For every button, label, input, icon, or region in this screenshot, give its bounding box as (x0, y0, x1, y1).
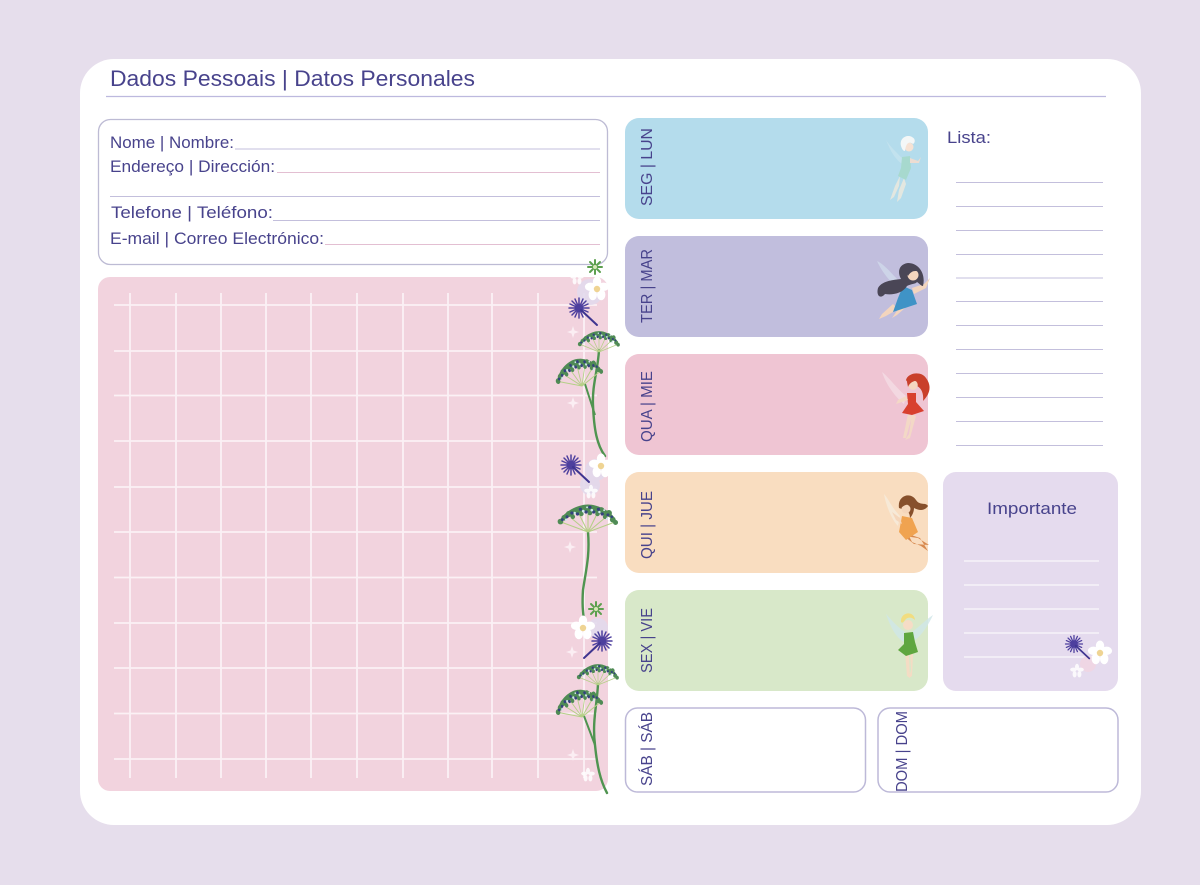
white card (80, 59, 1141, 825)
friday label: SEX | VIE (639, 608, 656, 673)
monday label: SEG | LUN (639, 128, 656, 206)
heading: Dados Pessoais | Datos Personales (110, 66, 475, 91)
panel: wednesday (625, 354, 930, 455)
lower blossoms (571, 602, 612, 658)
icon: red-haired fairy (882, 372, 930, 440)
panel: shopping list (947, 128, 1103, 446)
address field: Endereço | Dirección: (110, 157, 275, 176)
list heading: Lista: (947, 128, 991, 147)
sunday label: DOM | DOM (894, 711, 911, 792)
panel: saturday (626, 708, 866, 792)
icon: dark-haired fairy (877, 261, 930, 319)
flower cluster (1066, 636, 1112, 677)
important heading: Importante (987, 499, 1077, 518)
saturday label: SÁB | SÁB (639, 712, 656, 786)
upper umbel plant (552, 331, 620, 456)
top blossoms (569, 260, 609, 325)
middle umbel plant (558, 504, 618, 620)
pale flower shadows (577, 279, 608, 638)
panel: sunday (878, 708, 1118, 792)
flower garland (552, 260, 620, 793)
sparkles (564, 326, 579, 761)
panel: monday (625, 118, 928, 219)
panel: important (943, 472, 1118, 691)
name field: Nome | Nombre: (110, 133, 234, 152)
panel: tuesday (625, 236, 930, 337)
panel: friday (625, 590, 933, 691)
email field: E-mail | Correo Electrónico: (110, 229, 324, 248)
tuesday label: TER | MAR (639, 249, 656, 323)
wednesday label: QUA | MIE (639, 371, 656, 442)
icon: green fairy (886, 613, 933, 678)
thursday label: QUI | JUE (639, 491, 656, 559)
icon: pale fairy (886, 136, 921, 202)
panel: thursday (625, 472, 929, 573)
phone field: Telefone | Teléfono: (111, 203, 273, 222)
middle blossoms (561, 454, 613, 498)
panel: personal data (98, 120, 608, 264)
lower umbel plant (552, 664, 619, 793)
icon: brown-haired fairy (884, 494, 929, 551)
panel: pink grid notes (98, 277, 608, 791)
